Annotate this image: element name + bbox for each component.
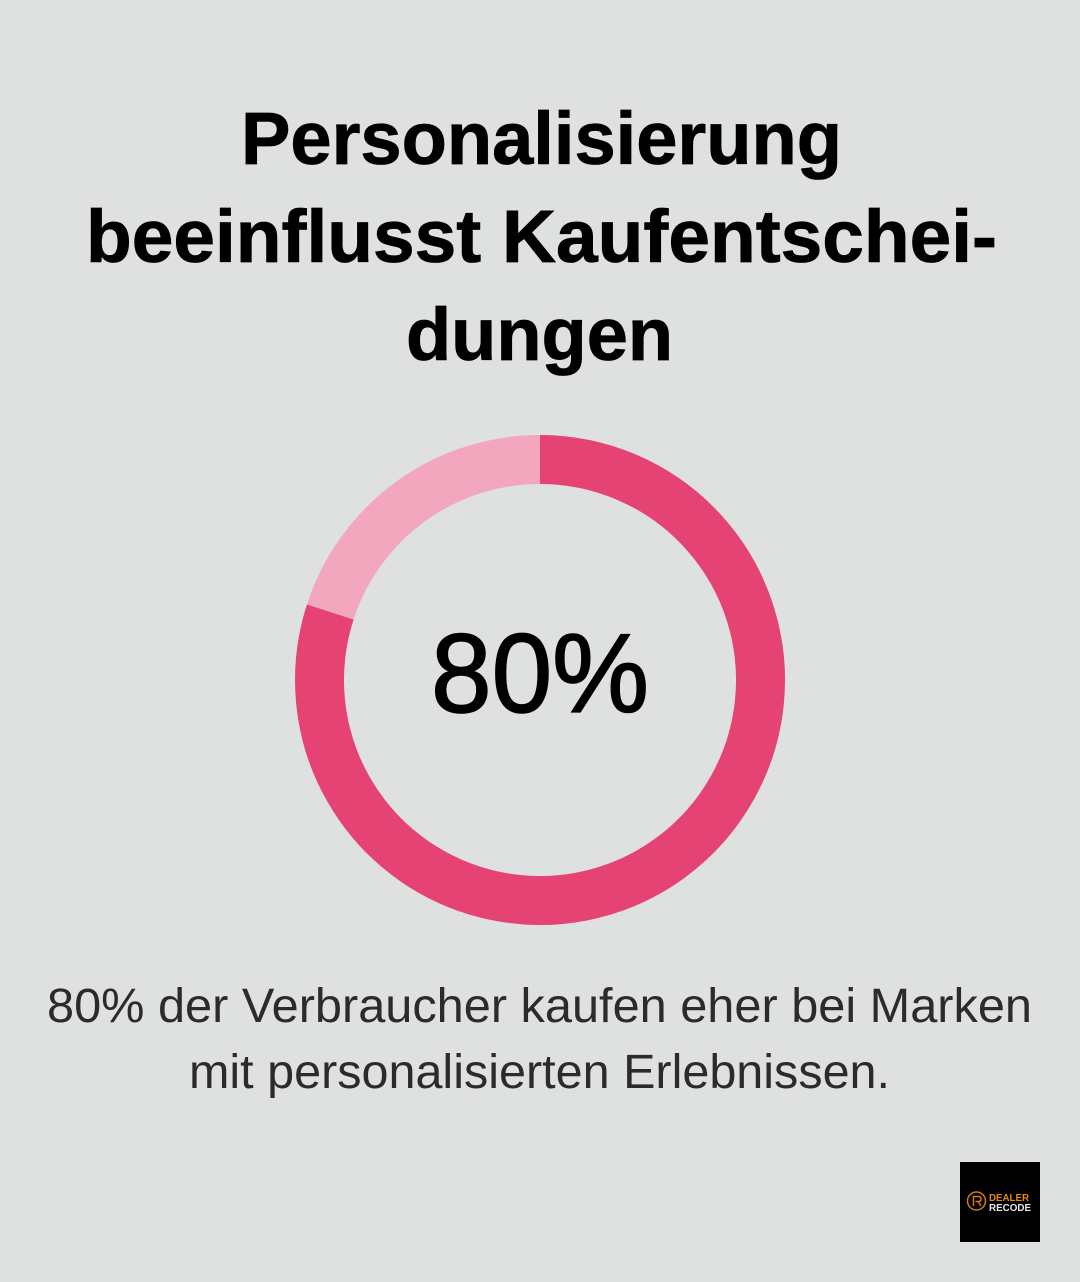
title: beeinflusst Kaufentschei- [86,195,997,278]
description text: 80% der Verbraucher kaufen eher bei Marken [47,980,1032,1033]
description text [47,980,1032,1099]
title: dungen [406,293,673,376]
title: Personalisierung [241,97,842,180]
donut chart: 80% [320,460,761,901]
icon: logo emblem [968,1192,986,1210]
logo wordmark: DEALER [989,1192,1029,1204]
logo: Dealer Recode [960,1162,1040,1242]
description text: mit personalisierten Erlebnissen. [189,1046,890,1099]
chart segment: 80% share [320,460,761,901]
title [86,97,997,376]
center value: 80% [431,611,649,736]
chart segment: remaining 20% [330,460,540,612]
logo wordmark: RECODE [989,1202,1031,1214]
logo wordmark [989,1192,1031,1214]
